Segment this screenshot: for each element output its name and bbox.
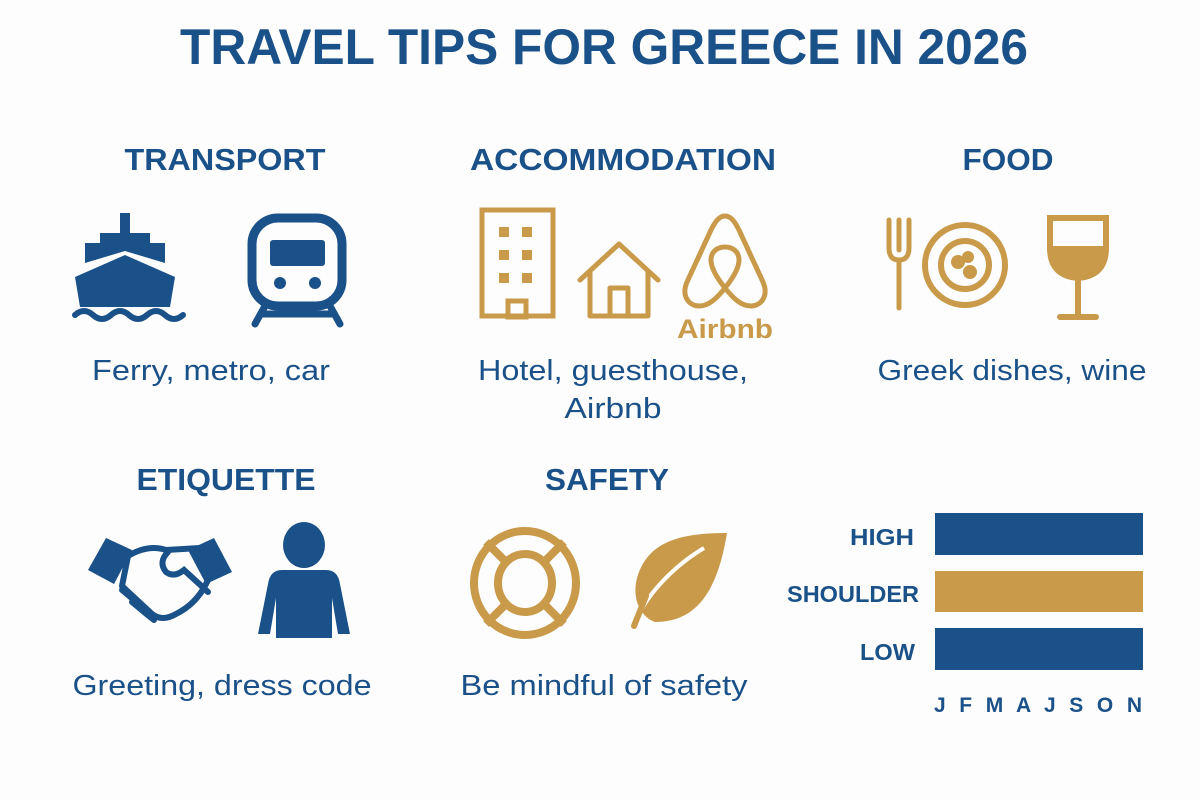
caption: transport: Ferry, metro, car	[92, 355, 330, 387]
bar: shoulder	[935, 571, 1143, 612]
chart: seasons	[787, 513, 1143, 717]
caption: etiquette: Greeting, dress code	[72, 670, 372, 702]
icon: airbnb: Airbnb	[677, 314, 773, 344]
heading: transport: TRANSPORT	[124, 142, 326, 177]
icon: ferry	[75, 213, 183, 319]
icon: house	[580, 244, 658, 316]
icon: handshake	[88, 538, 232, 620]
caption: safety: Be mindful of safety	[460, 670, 748, 702]
icon: fork	[889, 220, 909, 308]
panel: transport	[75, 142, 342, 387]
months axis: J F M A J S O N	[934, 694, 1142, 717]
icon: hotel	[482, 210, 553, 317]
panel: food	[878, 142, 1146, 387]
heading: safety: SAFETY	[545, 462, 669, 497]
caption: accommodation: Hotel, guesthouse,	[478, 355, 748, 387]
heading: etiquette: ETIQUETTE	[136, 462, 316, 497]
label: shoulder: SHOULDER	[787, 581, 919, 607]
caption: accommodation: Airbnb	[564, 393, 662, 425]
title: TRAVEL TIPS FOR GREECE IN 2026	[180, 19, 1028, 75]
icon: leaf	[634, 533, 727, 626]
heading: accommodation: ACCOMMODATION	[470, 142, 776, 177]
bar: high	[935, 513, 1143, 555]
bar: low	[935, 628, 1143, 670]
panel: accommodation	[470, 142, 776, 425]
caption: food: Greek dishes, wine	[878, 355, 1146, 387]
icon: wine glass	[1050, 218, 1106, 317]
icon: plate	[925, 225, 1005, 305]
icon: airbnb	[677, 216, 773, 344]
heading: food: FOOD	[962, 142, 1054, 177]
icon: lifebuoy	[474, 531, 576, 635]
label: low: LOW	[860, 639, 915, 665]
label: high: HIGH	[850, 524, 914, 550]
icon: person	[258, 522, 350, 638]
panel: etiquette	[72, 462, 372, 702]
icon: metro train	[252, 218, 342, 324]
panel: safety	[460, 462, 748, 702]
